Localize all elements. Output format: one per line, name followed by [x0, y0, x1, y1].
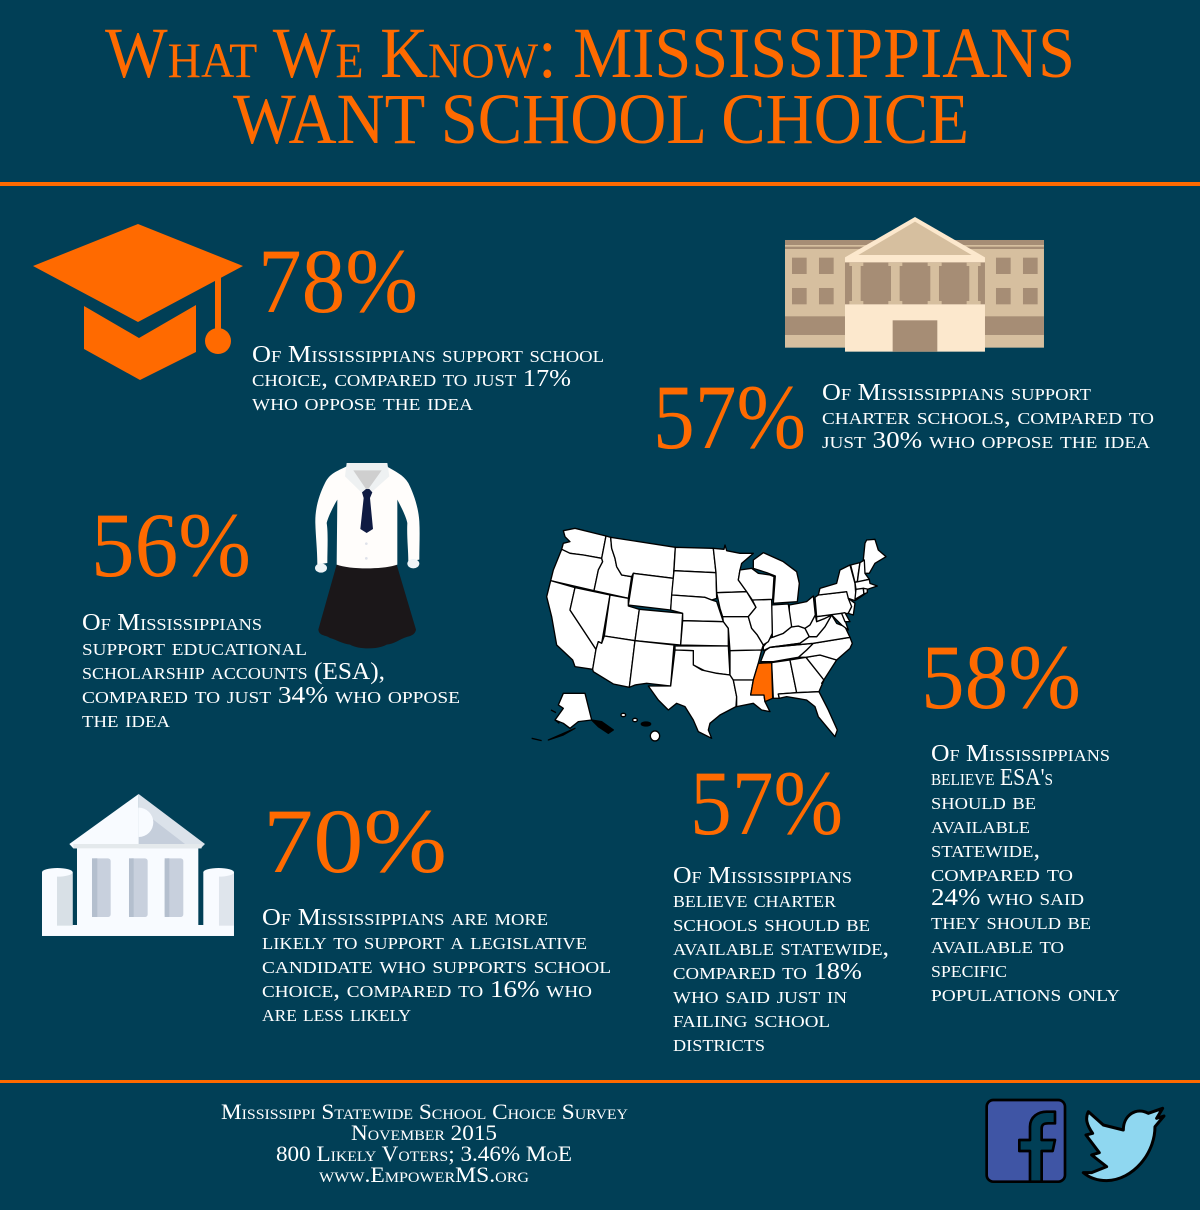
icon: graduation cap	[33, 224, 243, 380]
stat: 56% ESA: Of Mississippians	[82, 610, 262, 636]
stat: 57% charter statewide: schools should be	[673, 911, 870, 937]
stat: 56% ESA: scholarship accounts (ESA),	[82, 659, 385, 685]
footer source text: November 2015	[351, 1120, 497, 1145]
stat: 57% charter statewide: Of Mississippians	[673, 863, 852, 889]
stat: 58% ESA statewide: available	[931, 813, 1030, 839]
stat: 57% charter statewide: failing school	[673, 1007, 830, 1033]
stat: 70% legislative candidate	[262, 790, 611, 1027]
stat: 56% ESA: support educational	[82, 635, 307, 661]
stat: 78% school choice: 78%	[258, 230, 418, 332]
stat: 57% charter schools	[653, 366, 1154, 468]
stat: 57% charter statewide: districts	[673, 1031, 765, 1057]
icon: capitol building	[42, 794, 234, 936]
stat: 57% charter schools: just 30% who oppose the idea	[822, 428, 1151, 454]
footer source text: Mississippi Statewide School Choice Survey	[221, 1099, 628, 1124]
title: What We Know: MISSISSIPPIANS	[105, 13, 1075, 93]
stat: 57% charter schools: Of Mississippians support	[822, 380, 1092, 406]
stat: 58% ESA statewide: 58%	[921, 626, 1081, 728]
stat: 58% ESA statewide: statewide,	[931, 837, 1040, 863]
icon: facebook	[987, 1100, 1065, 1182]
stat: 57% charter statewide: compared to 18%	[673, 959, 862, 985]
stat: 58% ESA statewide: specific	[931, 957, 1007, 983]
footer source text: 800 Likely Voters; 3.46% MoE	[276, 1141, 572, 1166]
stat: 58% ESA statewide: compared to	[931, 861, 1073, 887]
stat: 58% ESA statewide: populations only	[931, 981, 1120, 1007]
stat: 70% legislative candidate: Of Mississippians are more	[262, 905, 548, 931]
stat: 57% charter statewide: available statewide,	[673, 935, 889, 961]
state: Mississippi	[751, 663, 773, 702]
stat: 58% ESA statewide: available to	[931, 933, 1064, 959]
stat: 57% charter statewide: who said just in	[673, 983, 847, 1009]
footer source text: www.EmpowerMS.org	[319, 1162, 529, 1187]
stat: 57% charter statewide: 57%	[690, 752, 843, 854]
stat: 56% ESA: compared to just 34% who oppose	[82, 683, 460, 709]
stat: 70% legislative candidate: choice, compared to 16% who	[262, 977, 592, 1003]
icon: school uniform	[315, 463, 420, 648]
stat: 78% school choice: who oppose the idea	[252, 390, 474, 416]
icon: school building	[785, 217, 1044, 352]
stat: 70% legislative candidate: 70%	[263, 790, 447, 892]
icon: twitter bird	[1083, 1108, 1164, 1181]
stat: 78% school choice	[252, 230, 604, 416]
stat: 58% ESA statewide	[921, 626, 1120, 1007]
stat: 56% ESA	[82, 494, 460, 733]
stat: 57% charter statewide	[673, 752, 889, 1057]
stat: 57% charter statewide: believe charter	[673, 887, 837, 913]
stat: 56% ESA: the idea	[82, 707, 171, 733]
stat: 58% ESA statewide: 24% who said	[931, 885, 1084, 911]
stat: 78% school choice: choice, compared to just 17%	[252, 366, 571, 392]
stat: 58% ESA statewide: should be	[931, 789, 1036, 815]
chart: US map with Mississippi highlighted	[532, 528, 886, 741]
stat: 58% ESA statewide: they should be	[931, 909, 1091, 935]
footer source text	[221, 1099, 628, 1187]
stat: 56% ESA: 56%	[91, 494, 251, 596]
stat: 70% legislative candidate: likely to support a legislative	[262, 929, 587, 955]
stat: 58% ESA statewide: Of Mississippians	[931, 741, 1110, 767]
title	[105, 13, 1075, 159]
stat: 70% legislative candidate: are less likely	[262, 1001, 411, 1027]
title: WANT SCHOOL CHOICE	[233, 79, 969, 159]
stat: 57% charter schools: charter schools, compared to	[822, 404, 1154, 430]
stat: 58% ESA statewide: believe ESA's	[931, 765, 1053, 791]
stat: 57% charter schools: 57%	[653, 366, 806, 468]
stat: 70% legislative candidate: candidate who supports school	[262, 953, 611, 979]
stat: 78% school choice: Of Mississippians support school	[252, 342, 604, 368]
